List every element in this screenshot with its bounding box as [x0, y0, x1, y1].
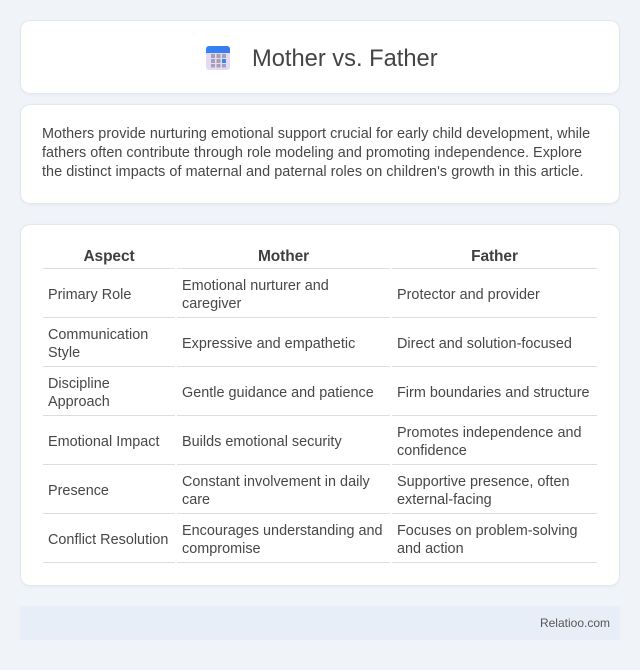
table header: Aspect: Aspect [83, 248, 135, 265]
row: Conflict Resolution: Conflict Resolution [48, 532, 168, 548]
row: Primary Role: Emotional nurturer and [182, 278, 329, 294]
row: Primary Role: caregiver [182, 296, 241, 312]
row: Emotional Impact: Promotes independence and [397, 425, 582, 441]
row: Communication Style: Direct and solution-focused [397, 336, 572, 352]
table header: Mother: Mother [258, 248, 309, 265]
panel: title card [20, 20, 620, 94]
row: Presence: Presence [48, 483, 109, 499]
row: Presence [48, 474, 570, 508]
row: Discipline Approach: Gentle guidance and patience [182, 385, 374, 401]
intro text [42, 126, 590, 180]
row: Conflict Resolution: compromise [182, 541, 261, 557]
row: Communication Style: Style [48, 345, 80, 361]
row: Discipline Approach [48, 376, 590, 410]
row: Conflict Resolution [48, 523, 578, 557]
row: Presence: external-facing [397, 492, 492, 508]
row: Discipline Approach: Approach [48, 394, 110, 410]
row: Discipline Approach: Discipline [48, 376, 110, 392]
row: Presence: Supportive presence, often [397, 474, 570, 490]
row: Emotional Impact: Builds emotional security [182, 434, 342, 450]
title: Mother vs. Father [252, 46, 438, 72]
row: Conflict Resolution: Encourages understanding and [182, 523, 383, 539]
row: Conflict Resolution: Focuses on problem-solving [397, 523, 578, 539]
intro text: fathers often contribute through role modeling and promoting independence. Explore [42, 145, 582, 161]
row: Primary Role: Primary Role [48, 287, 131, 303]
row: Presence: care [182, 492, 210, 508]
row: Presence: Constant involvement in daily [182, 474, 370, 490]
intro text: the distinct impacts of maternal and paternal roles on children's growth in this article. [42, 164, 584, 180]
row: Discipline Approach: Firm boundaries and structure [397, 385, 590, 401]
table header: Father: Father [471, 248, 518, 265]
row: Communication Style: Communication [48, 327, 148, 343]
row: Primary Role: Protector and provider [397, 287, 540, 303]
footer bar [20, 606, 620, 640]
row: Communication Style [48, 327, 572, 361]
intro text: Mothers provide nurturing emotional support crucial for early child development, while [42, 126, 590, 142]
row: Emotional Impact: Emotional Impact [48, 434, 160, 450]
row: Communication Style: Expressive and empathetic [182, 336, 355, 352]
row: Emotional Impact: confidence [397, 443, 467, 459]
row: Primary Role [48, 278, 540, 312]
icon: calendar [206, 46, 230, 70]
footer text: Relatioo.com [540, 616, 610, 630]
row: Conflict Resolution: and action [397, 541, 464, 557]
panel: comparison table [20, 224, 620, 586]
row: Emotional Impact [48, 425, 582, 459]
panel: introduction [20, 104, 620, 204]
